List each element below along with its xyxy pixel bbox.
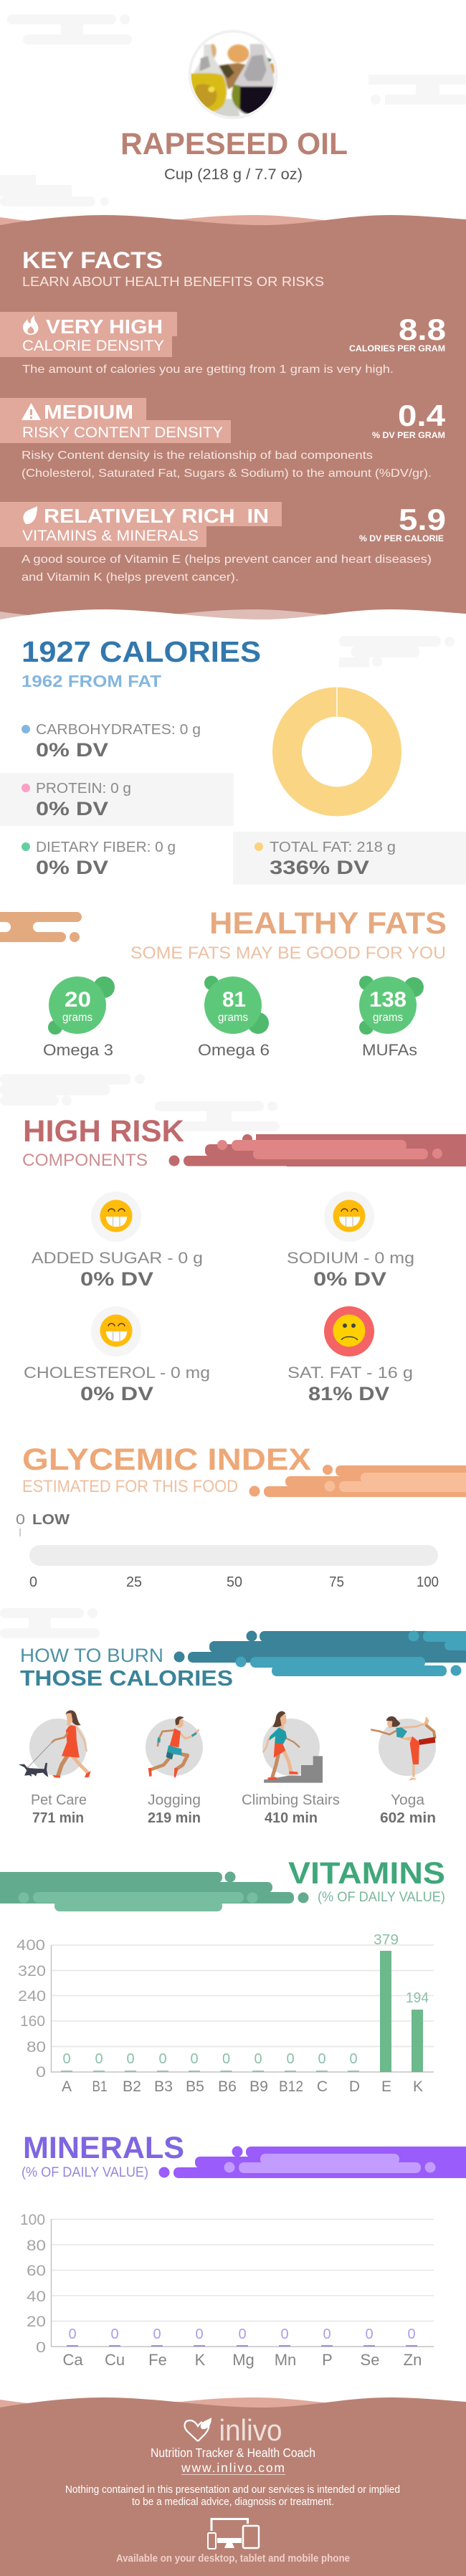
- icon: woman on stairs: [262, 1711, 323, 1783]
- fact: calorie density: 8.8: [399, 313, 446, 346]
- bar chart: vitamins: E: [381, 2078, 391, 2095]
- fact: calorie density: The amount of calories you are getting from 1 gram is very high.: [22, 363, 394, 376]
- bar chart: vitamins: 80: [27, 2039, 46, 2055]
- bar chart: minerals: 0: [68, 2327, 77, 2342]
- gauge marker: LOW: [32, 1512, 70, 1528]
- heading: those calories: THOSE CALORIES: [20, 1665, 233, 1691]
- bar chart: vitamins: 320: [18, 1963, 46, 1979]
- item: saturated fat: 81% DV: [308, 1383, 389, 1405]
- bar chart: minerals: 20: [27, 2314, 46, 2330]
- bar chart: vitamins: B3: [154, 2078, 173, 2095]
- activity: jogging: Jogging: [148, 1792, 201, 1808]
- fact: vitamins and minerals: 5.9: [399, 503, 446, 536]
- heading: minerals: MINERALS: [23, 2131, 184, 2165]
- gauge marker: 0: [16, 1512, 25, 1528]
- icon: rapeseed oil photo: [189, 30, 277, 119]
- fact: risky content density: (Cholesterol, Saturated Fat, Sugars & Sodium) to the amount (%DV/gr).: [22, 467, 432, 480]
- fact: vitamins and minerals: A good source of Vitamin E (helps prevent cancer and heart diseases): [22, 553, 432, 566]
- activity: pet care: Pet Care: [31, 1792, 87, 1808]
- bar chart: vitamins: B6: [218, 2078, 237, 2095]
- decoration: burn calories: [173, 1630, 466, 1676]
- bar chart: vitamins: 0: [62, 2051, 71, 2067]
- icon: sad face: [333, 1315, 366, 1346]
- bar chart: minerals: Mg: [232, 2351, 255, 2369]
- bar chart: vitamins: 400: [16, 1937, 45, 1954]
- activity: pet care: 771 min: [32, 1810, 84, 1826]
- item: sodium: 0% DV: [313, 1268, 386, 1290]
- icon: devices: [208, 2519, 259, 2549]
- bar chart: vitamins: A: [62, 2078, 72, 2095]
- bar chart: vitamins: 379: [374, 1932, 399, 1948]
- panel: key facts: [0, 215, 466, 624]
- bar chart: minerals: [20, 2212, 434, 2369]
- fact: risky content density: Risky Content density is the relationship of bad components: [22, 450, 373, 462]
- row: total fat: TOTAL FAT: 218 g: [270, 840, 396, 855]
- subheading: glycemic index: ESTIMATED FOR THIS FOOD: [22, 1477, 238, 1496]
- bar chart: vitamins: B9: [249, 2078, 268, 2095]
- availability note: Available on your desktop, tablet and mobile phone: [116, 2553, 350, 2565]
- heading: calories: 1927 CALORIES: [22, 635, 261, 668]
- fact: vitamins and minerals: % DV PER CALORIE: [359, 533, 444, 543]
- row: total fat: 336% DV: [270, 857, 369, 878]
- bar chart: minerals: K: [195, 2351, 206, 2369]
- bar chart: minerals: Zn: [404, 2351, 422, 2369]
- stat: omega 3: 20: [65, 988, 91, 1012]
- gauge scale: 75: [329, 1574, 344, 1590]
- bar chart: minerals: Ca: [62, 2351, 83, 2369]
- fact: vitamins and minerals: RELATIVELY RICH IN: [44, 505, 269, 527]
- footer wave: [0, 2397, 324, 2416]
- bar chart: vitamins: B12: [279, 2078, 303, 2095]
- gauge scale: 50: [227, 1574, 242, 1590]
- bar chart: vitamins: 0: [286, 2051, 295, 2067]
- section heading: LEARN ABOUT HEALTH BENEFITS OR RISKS: [22, 274, 324, 289]
- fact: risky content density: 0.4: [398, 399, 446, 432]
- icon: yoga pose: [371, 1716, 436, 1780]
- heading: how to burn: HOW TO BURN: [20, 1645, 163, 1666]
- item: sodium: [287, 1192, 414, 1290]
- section heading: KEY FACTS: [22, 247, 163, 273]
- bar chart: vitamins: 240: [18, 1988, 46, 2005]
- bar chart: vitamins: K: [413, 2078, 423, 2095]
- bar chart: vitamins: D: [349, 2078, 360, 2095]
- row: dietary fiber: [22, 840, 176, 878]
- bar chart: minerals: 0: [365, 2327, 374, 2342]
- row: protein: PROTEIN: 0 g: [36, 781, 131, 797]
- item: sodium: SODIUM - 0 mg: [287, 1249, 414, 1267]
- decoration: glycemic index: [249, 1465, 466, 1497]
- icon: grinning face: [333, 1200, 366, 1232]
- bar chart: vitamins: C: [317, 2078, 328, 2095]
- bar chart: minerals: 0: [153, 2327, 161, 2342]
- panel: minerals: [20, 2131, 466, 2369]
- decoration: vitamins: [0, 1871, 308, 1911]
- icon: leaf: [23, 506, 37, 524]
- stat: omega 3: [43, 976, 115, 1059]
- heading: healthy fats: HEALTHY FATS: [209, 906, 447, 941]
- fact: calorie density: CALORIE DENSITY: [22, 338, 164, 354]
- icon: warning: [22, 403, 41, 420]
- activity: climbing stairs: [242, 1711, 340, 1826]
- stat: mufas: 138: [369, 988, 406, 1012]
- item: cholesterol: CHOLESTEROL - 0 mg: [24, 1364, 210, 1382]
- fact: vitamins and minerals: [0, 502, 446, 584]
- decoration: high risk: [169, 1134, 466, 1166]
- donut chart: [287, 687, 387, 802]
- header section: [0, 14, 466, 206]
- bar chart: minerals: 0: [195, 2327, 204, 2342]
- stat: mufas: grams: [373, 1012, 403, 1024]
- panel: how to burn calories: [0, 1608, 466, 1826]
- bar chart: vitamins: 0: [190, 2051, 199, 2067]
- panel: glycemic index: [16, 1443, 466, 1590]
- bar chart: minerals: 80: [27, 2238, 46, 2254]
- heading: high risk: HIGH RISK: [23, 1114, 184, 1149]
- activity: jogging: 219 min: [148, 1810, 201, 1826]
- gauge scale: [29, 1574, 439, 1590]
- row: carbohydrates: [22, 722, 201, 761]
- fact: vitamins and minerals: VITAMINS & MINERALS: [22, 528, 199, 544]
- heading: vitamins: VITAMINS: [288, 1856, 445, 1891]
- bar chart: vitamins: B1: [92, 2078, 108, 2095]
- activity: pet care: [19, 1711, 91, 1826]
- fact: risky content density: [0, 398, 446, 480]
- panel: vitamins: [0, 1856, 445, 2095]
- fact: risky content density: MEDIUM: [44, 401, 133, 423]
- disclaimer: to be a medical advice, diagnosis or treatment.: [132, 2496, 334, 2508]
- item: cholesterol: [24, 1306, 210, 1405]
- decoration: minerals: [159, 2147, 466, 2178]
- title: RAPESEED OIL: [120, 127, 348, 161]
- item: added sugar: 0% DV: [80, 1268, 153, 1290]
- item: saturated fat: SAT. FAT - 16 g: [287, 1364, 413, 1382]
- icon: flame: [23, 315, 38, 335]
- item: added sugar: ADDED SUGAR - 0 g: [32, 1249, 203, 1267]
- activity: climbing stairs: Climbing Stairs: [242, 1792, 340, 1808]
- disclaimer: [65, 2484, 400, 2508]
- activity: jogging: [146, 1716, 203, 1826]
- top wave: [0, 215, 324, 237]
- row: dietary fiber: DIETARY FIBER: 0 g: [36, 840, 176, 855]
- bar chart: vitamins: 0: [95, 2051, 103, 2067]
- stat: omega 6: grams: [218, 1012, 248, 1024]
- bar chart: minerals: 60: [27, 2263, 46, 2279]
- stat: omega 6: Omega 6: [198, 1041, 270, 1059]
- bar chart: minerals: Mn: [275, 2351, 296, 2369]
- gauge scale: 100: [417, 1574, 439, 1590]
- gauge scale: 0: [29, 1574, 37, 1590]
- bar chart: vitamins: 0: [158, 2051, 167, 2067]
- bar chart: minerals: 0: [280, 2327, 289, 2342]
- row: protein: [0, 773, 234, 826]
- bar chart: vitamins: B2: [123, 2078, 141, 2095]
- activity: yoga: [371, 1716, 436, 1826]
- subheading: calories from fat: 1962 FROM FAT: [22, 672, 161, 690]
- item: cholesterol: 0% DV: [80, 1383, 153, 1405]
- row: protein: 0% DV: [36, 798, 108, 819]
- bar chart: vitamins: 0: [126, 2051, 135, 2067]
- bar chart: vitamins: [16, 1932, 434, 2095]
- logo: inlivo: [185, 2413, 282, 2447]
- stat: mufas: [359, 976, 424, 1059]
- gauge bar: [29, 1545, 438, 1566]
- bar chart: vitamins: 0: [36, 2064, 46, 2081]
- bar chart: minerals: 0: [110, 2327, 119, 2342]
- subheading: vitamins: (% OF DAILY VALUE): [318, 1889, 445, 1905]
- bar chart: vitamins: 0: [318, 2051, 326, 2067]
- activity: yoga: 602 min: [380, 1810, 436, 1826]
- stat: omega 3: grams: [62, 1012, 92, 1024]
- subheading: minerals: (% OF DAILY VALUE): [22, 2164, 148, 2180]
- bar chart: minerals: 100: [20, 2212, 45, 2228]
- bar chart: minerals: Fe: [148, 2351, 167, 2369]
- row: dietary fiber: 0% DV: [36, 857, 108, 878]
- subheading: components: COMPONENTS: [22, 1151, 148, 1170]
- bar chart: minerals: Se: [361, 2351, 379, 2369]
- activity: climbing stairs: 410 min: [265, 1810, 318, 1826]
- bar chart: minerals: 0: [407, 2327, 416, 2342]
- fact: risky content density: % DV PER GRAM: [372, 430, 445, 440]
- bar chart: vitamins: 194: [406, 1990, 429, 2006]
- bar chart: minerals: 0: [323, 2327, 331, 2342]
- panel: calories: [0, 635, 466, 885]
- bar chart: vitamins: B5: [186, 2078, 204, 2095]
- bar chart: minerals: 0: [36, 2339, 46, 2356]
- icon: grinning face: [100, 1315, 132, 1346]
- section heading: [22, 247, 324, 289]
- icon: grinning face: [100, 1200, 132, 1232]
- activity: yoga: Yoga: [391, 1792, 425, 1808]
- serving size: Cup (218 g / 7.7 oz): [164, 166, 303, 183]
- item: added sugar: [32, 1192, 203, 1290]
- stat: omega 6: [198, 976, 270, 1059]
- bar chart: vitamins: 0: [349, 2051, 358, 2067]
- item: saturated fat: [287, 1306, 413, 1405]
- row: total fat: [233, 832, 466, 885]
- fact: calorie density: CALORIES PER GRAM: [349, 343, 445, 353]
- row: carbohydrates: CARBOHYDRATES: 0 g: [36, 722, 201, 738]
- panel: footer: [0, 2397, 466, 2576]
- gauge marker: [16, 1512, 70, 1536]
- stat: mufas: MUFAs: [362, 1041, 417, 1059]
- stat: omega 6: 81: [222, 988, 246, 1012]
- bar chart: minerals: 0: [238, 2327, 247, 2342]
- bar chart: vitamins: 160: [20, 2013, 45, 2030]
- panel: high risk components: [0, 1074, 466, 1405]
- bar chart: minerals: 40: [27, 2289, 46, 2305]
- bar chart: vitamins: 0: [222, 2051, 230, 2067]
- fact: risky content density: RISKY CONTENT DENSITY: [22, 424, 223, 441]
- fact: calorie density: VERY HIGH: [46, 315, 163, 338]
- fact: calorie density: [0, 312, 446, 376]
- decoration: healthy fats: [0, 912, 82, 942]
- stat: omega 3: Omega 3: [43, 1041, 113, 1059]
- row: carbohydrates: 0% DV: [36, 739, 108, 761]
- bar chart: vitamins: 0: [254, 2051, 262, 2067]
- website link: www.inlivo.com: [181, 2461, 285, 2475]
- disclaimer: Nothing contained in this presentation and our services is intended or implied: [65, 2484, 400, 2496]
- bar chart: minerals: P: [322, 2351, 333, 2369]
- gauge scale: 25: [126, 1574, 142, 1590]
- icon: runner: [146, 1716, 203, 1777]
- fact: vitamins and minerals: and Vitamin K (helps prevent cancer).: [22, 571, 239, 584]
- heading: glycemic index: GLYCEMIC INDEX: [22, 1443, 311, 1477]
- logo: inlivo: inlivo: [219, 2413, 282, 2447]
- icon: woman walking dog: [19, 1711, 91, 1778]
- subheading: healthy fats: SOME FATS MAY BE GOOD FOR YOU: [130, 944, 446, 963]
- tagline: Nutrition Tracker & Health Coach: [151, 2446, 315, 2460]
- bar chart: minerals: Cu: [105, 2351, 125, 2369]
- panel: healthy fats: [0, 906, 447, 1059]
